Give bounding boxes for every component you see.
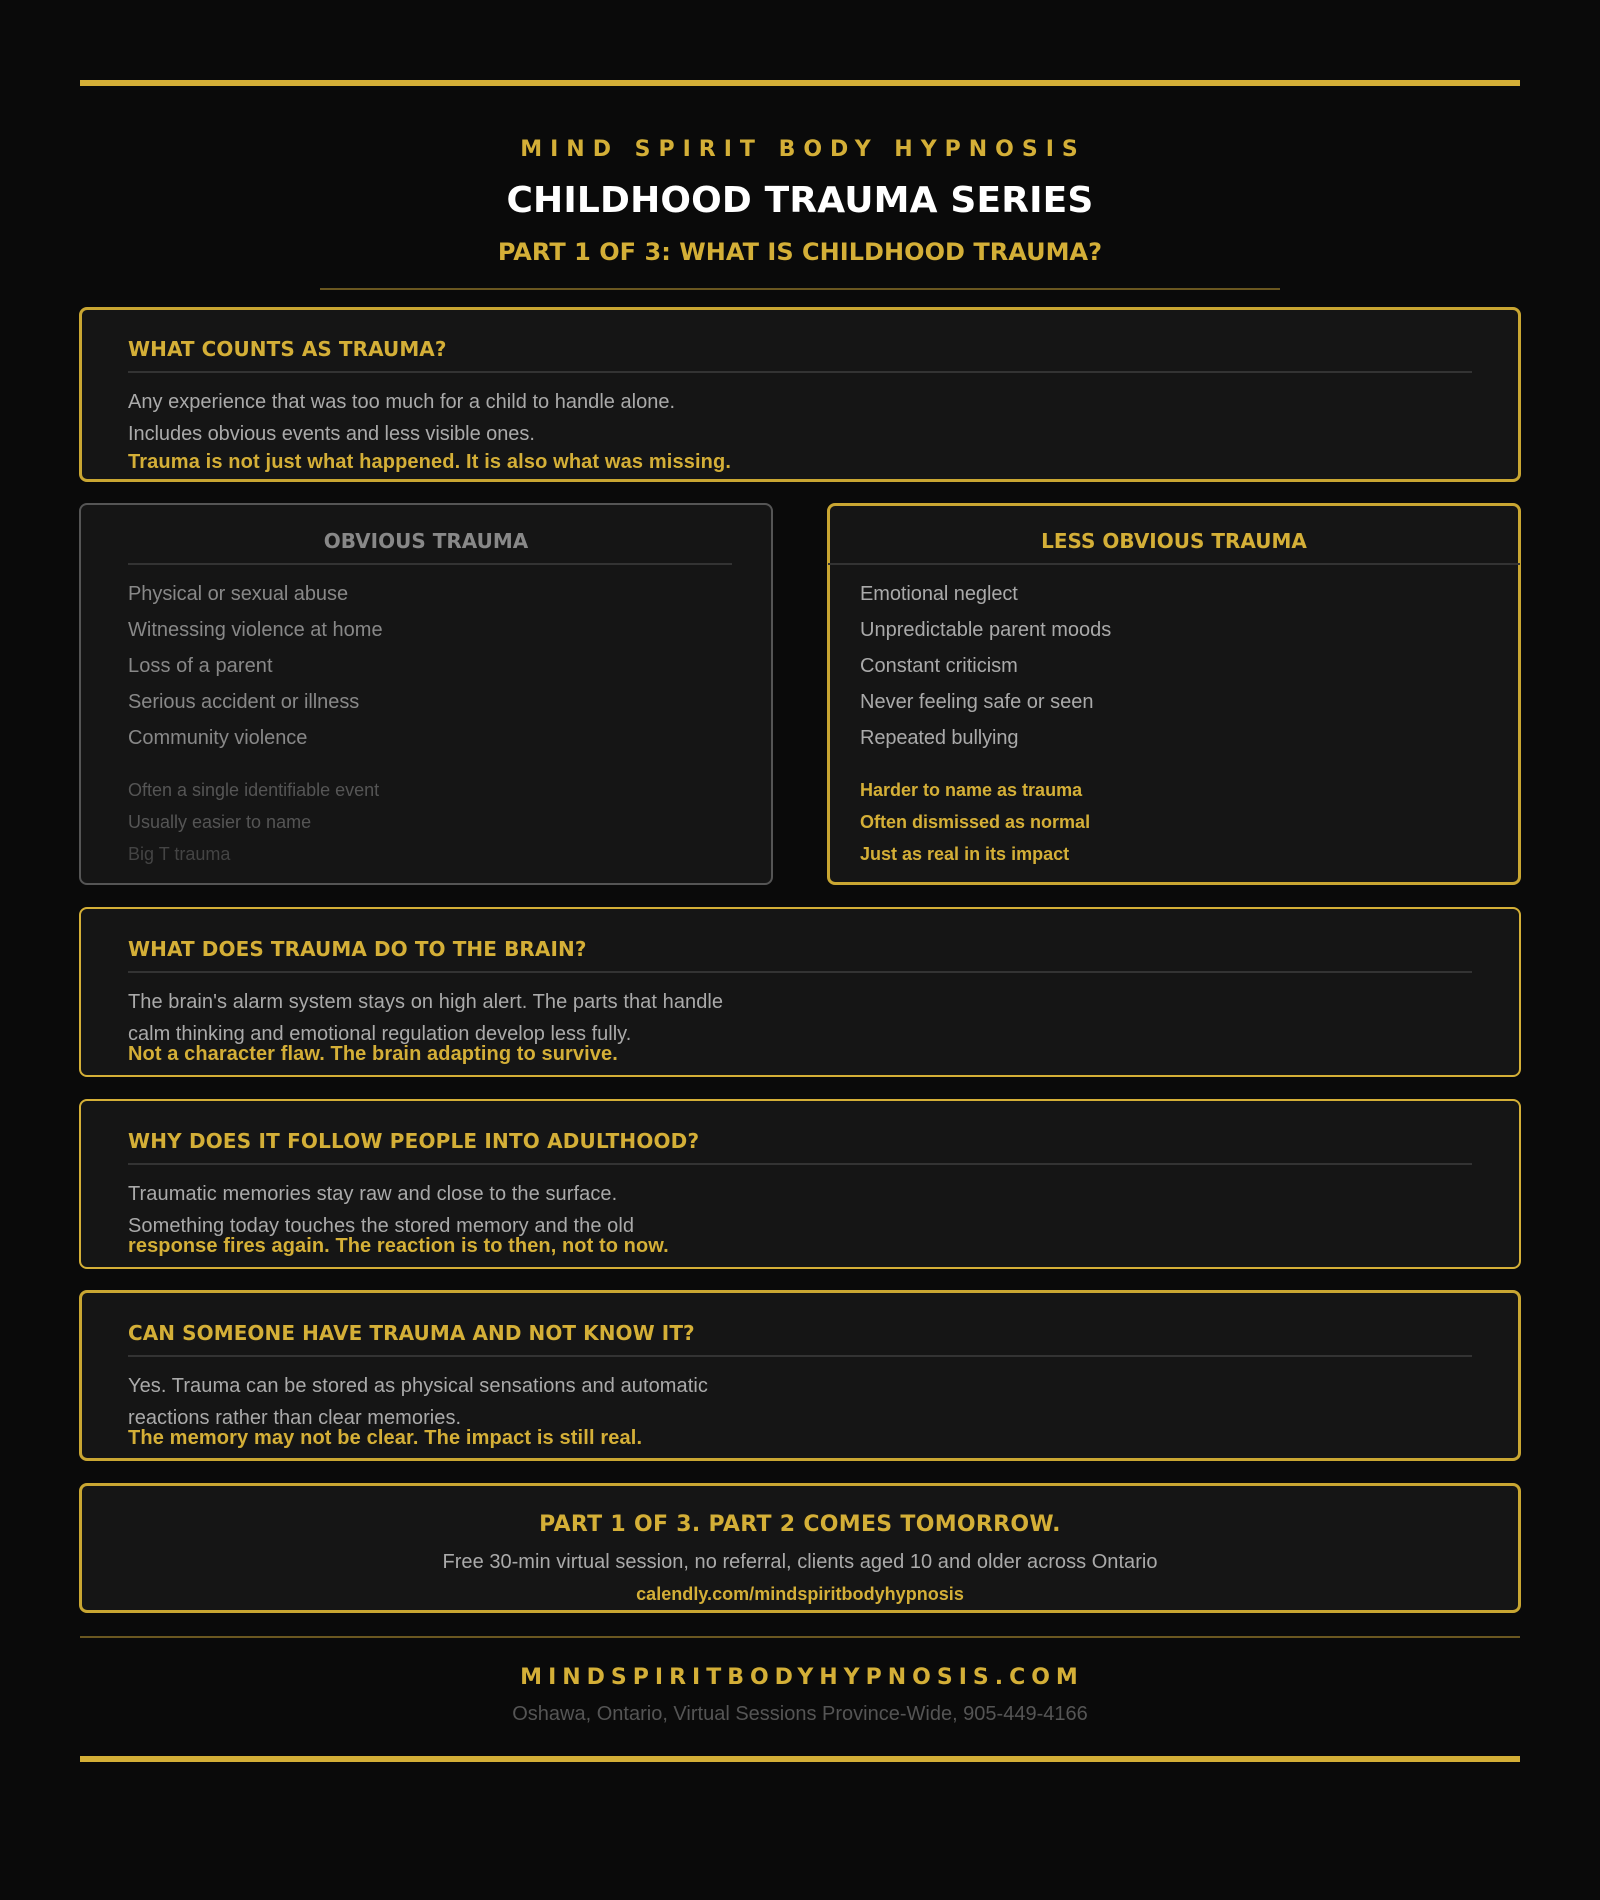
header brand: MIND SPIRIT BODY HYPNOSIS	[520, 137, 1086, 162]
list of less obvious trauma experiences	[860, 583, 1111, 749]
body text line 2: Includes obvious events and less visible ones.	[128, 423, 535, 445]
body text line 1: Traumatic memories stay raw and close to the surface.	[128, 1183, 617, 1205]
body text line 1: The brain's alarm system stays on high alert. The parts that handle	[128, 991, 723, 1013]
highlight text: The memory may not be clear. The impact is still real.	[128, 1427, 642, 1449]
title: CHILDHOOD TRAUMA SERIES	[506, 180, 1094, 221]
panel: what counts as trauma	[79, 307, 1521, 482]
booking link: calendly.com/mindspiritbodyhypnosis	[636, 1584, 964, 1604]
call to action heading: PART 1 OF 3. PART 2 COMES TOMORROW.	[539, 1512, 1061, 1537]
header divider	[320, 288, 1280, 290]
body text line 2: reactions rather than clear memories.	[128, 1407, 461, 1429]
list of obvious trauma events: Physical or sexual abuse	[128, 583, 348, 605]
notes on less obvious trauma	[860, 780, 1090, 864]
bottom gold bar	[80, 1756, 1520, 1762]
highlight text: Trauma is not just what happened. It is also what was missing.	[128, 451, 731, 473]
list of obvious trauma events: Loss of a parent	[128, 655, 273, 677]
notes on obvious trauma: Usually easier to name	[128, 812, 311, 832]
panel: trauma without knowing	[79, 1290, 1521, 1461]
body text line 1: Any experience that was too much for a child to handle alone.	[128, 391, 675, 413]
session details: Free 30-min virtual session, no referral, clients aged 10 and older across Ontario	[442, 1551, 1158, 1573]
notes on obvious trauma: Often a single identifiable event	[128, 780, 379, 800]
panel heading: WHAT COUNTS AS TRAUMA?	[128, 337, 447, 361]
notes on less obvious trauma: Just as real in its impact	[860, 844, 1069, 864]
list of obvious trauma events: Community violence	[128, 727, 307, 749]
list of obvious trauma events	[128, 583, 383, 749]
list of less obvious trauma experiences: Constant criticism	[860, 655, 1018, 677]
panel heading: LESS OBVIOUS TRAUMA	[1041, 529, 1307, 553]
list of less obvious trauma experiences: Unpredictable parent moods	[860, 619, 1111, 641]
notes on less obvious trauma: Often dismissed as normal	[860, 812, 1090, 832]
list of less obvious trauma experiences: Never feeling safe or seen	[860, 691, 1093, 713]
notes on obvious trauma: Big T trauma	[128, 844, 230, 864]
panel: obvious trauma	[79, 503, 773, 885]
panel: trauma and the brain	[79, 907, 1521, 1077]
list of obvious trauma events: Witnessing violence at home	[128, 619, 383, 641]
panel heading: WHY DOES IT FOLLOW PEOPLE INTO ADULTHOOD?	[128, 1129, 699, 1153]
notes on obvious trauma	[128, 780, 379, 864]
body text line 2: calm thinking and emotional regulation develop less fully.	[128, 1023, 631, 1045]
top gold bar	[80, 80, 1520, 86]
panel: call to action	[79, 1483, 1521, 1613]
panel: less obvious trauma	[827, 503, 1521, 885]
panel: following into adulthood	[79, 1099, 1521, 1269]
panel heading: WHAT DOES TRAUMA DO TO THE BRAIN?	[128, 937, 587, 961]
notes on less obvious trauma: Harder to name as trauma	[860, 780, 1082, 800]
highlight text: response fires again. The reaction is to then, not to now.	[128, 1235, 669, 1257]
highlight text: Not a character flaw. The brain adapting to survive.	[128, 1043, 618, 1065]
list of less obvious trauma experiences: Emotional neglect	[860, 583, 1018, 605]
footer divider	[80, 1636, 1520, 1638]
footer website: MINDSPIRITBODYHYPNOSIS.COM	[520, 1665, 1084, 1690]
body text line 2: Something today touches the stored memory and the old	[128, 1215, 634, 1237]
subtitle: PART 1 OF 3: WHAT IS CHILDHOOD TRAUMA?	[498, 238, 1102, 266]
footer contact details: Oshawa, Ontario, Virtual Sessions Province-Wide, 905-449-4166	[512, 1703, 1088, 1725]
list of less obvious trauma experiences: Repeated bullying	[860, 727, 1018, 749]
body text line 1: Yes. Trauma can be stored as physical sensations and automatic	[128, 1375, 708, 1397]
panel heading: CAN SOMEONE HAVE TRAUMA AND NOT KNOW IT?	[128, 1321, 695, 1345]
panel heading: OBVIOUS TRAUMA	[324, 529, 528, 553]
list of obvious trauma events: Serious accident or illness	[128, 691, 359, 713]
